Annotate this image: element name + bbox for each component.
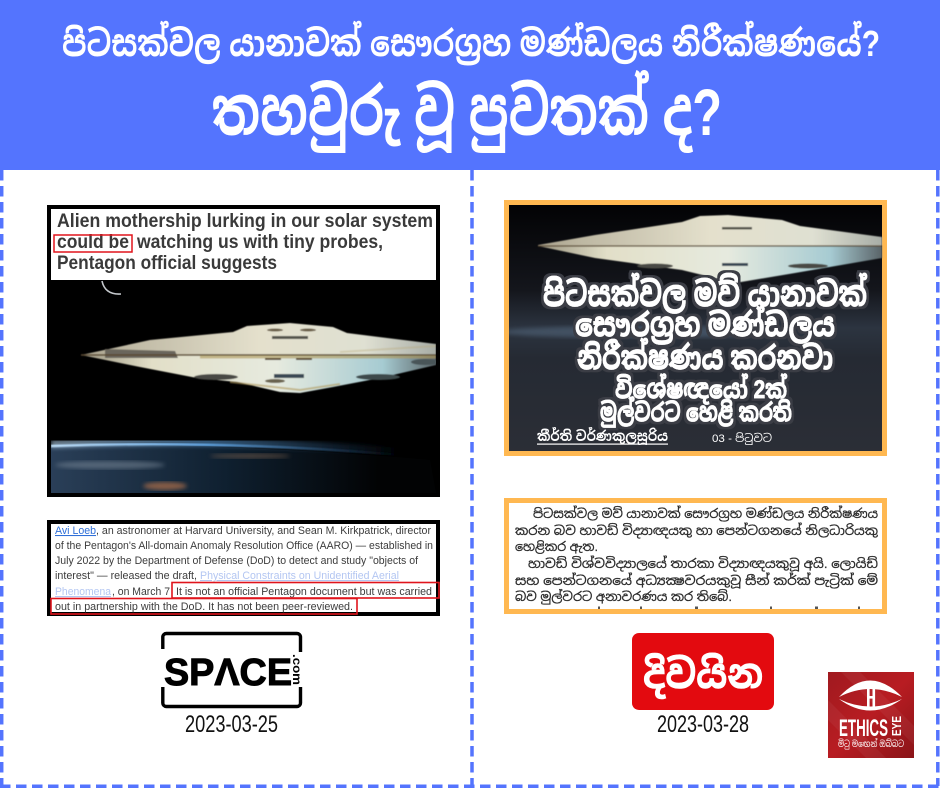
panel: space.com article excerpt: out in partnership with the DoD. It has not been peer-reviewed. — [55, 601, 353, 613]
panel: space.com article excerpt: July 2022 by the Department of Defense (DoD) to detect and study "objects of — [55, 555, 418, 567]
panel: space.com article excerpt: It is not an official Pentagon document but was carried — [176, 586, 432, 598]
headline box: Pentagon official suggests — [57, 253, 277, 274]
headline box: watching us with tiny probes, — [136, 232, 383, 253]
moon crescent — [102, 281, 121, 294]
logo: divaina — [632, 633, 774, 710]
byline — [537, 427, 772, 445]
panel: space.com article excerpt: Phenomena — [55, 586, 111, 598]
date: space.com: 2023-03-25 — [185, 711, 278, 738]
panel: space.com article excerpt: interest" — released the draft, — [55, 570, 197, 582]
panel: divaina article excerpt: පිටසක්වල මව් යානාවක් සෞරග්‍රහ මණ්ඩලය නිරීක්ෂණය — [533, 506, 878, 521]
byline: කීර්ති වර්ණකුලසූරිය — [537, 427, 668, 445]
logo: space.com — [163, 634, 304, 706]
panel: dashed frame — [0, 170, 940, 786]
panel: space.com article excerpt: of the Pentagon's All-domain Anomaly Resolution Office (AARO) — established in — [55, 540, 433, 552]
panel: divaina article excerpt: සහ පෙන්ටගනයේ අධ්‍යක්‍ෂවරයකුවූ සීන් කර්ක් පැට්‍රික් මේ — [515, 573, 878, 588]
logo: ethics eye: ETHICS — [839, 715, 888, 742]
front page headline: විශේෂඥයෝ 2ක් — [615, 373, 788, 405]
logo: divaina: දිවයින — [643, 652, 763, 699]
panel: space.com article excerpt: Avi Loeb, an astronomer at Harvard University, and Sean M. Kirkpatrick, director — [55, 525, 431, 537]
illustration: flying saucer — [538, 215, 882, 283]
front page headline: නිරීක්ෂණය කරනවා — [577, 337, 833, 376]
clipped next line fragment — [598, 606, 860, 609]
front page headline: මුල්වරට හෙළි කරති — [600, 397, 792, 428]
panel: space.com article excerpt — [49, 522, 439, 614]
header banner — [0, 0, 940, 170]
logo: ethics eye: මිටු මඟෙන් ඔබ්බට — [838, 738, 904, 749]
earth horizon — [51, 442, 436, 493]
headline box — [51, 209, 436, 280]
panel: space.com article excerpt: , on March 7 — [112, 586, 170, 598]
logo: space.com: .com — [290, 654, 304, 685]
front page headline: පිටසක්වල මව් යානාවක් — [543, 272, 867, 314]
panel: space.com article image — [47, 205, 440, 497]
logo: ethics eye — [828, 672, 914, 758]
panel: divaina article excerpt: බව මුල්වරට අනාවරණය කර තිබේ. — [515, 588, 732, 604]
byline: 03 - පිටුවට — [712, 432, 772, 445]
heading line 2: තහවුරු වූ පුවතක් ද? — [212, 70, 722, 153]
headline box: Alien mothership lurking in our solar system — [57, 211, 433, 232]
panel: divaina article excerpt: හාවඩ් විශ්වවිද්‍යාලයේ තාරකා විද්‍යාඥයකුවූ අයි. ලොයිඩ් — [528, 556, 878, 571]
panel: divaina front page clipping — [500, 202, 884, 454]
front page headline: සෞරග්‍රහ මණ්ඩලය — [575, 305, 835, 345]
panel: divaina article excerpt: කරන බව හාවඩ් විද්‍යාඥයකු හා පෙන්ටගනයේ නිලධාරියකු — [515, 523, 878, 538]
panel: divaina article excerpt — [506, 500, 884, 612]
logo: ethics eye: EYE — [889, 716, 904, 736]
date: divaina: 2023-03-28 — [657, 711, 749, 738]
illustration: flying saucer — [81, 323, 439, 393]
logo: space.com: SPΛCE — [164, 652, 292, 694]
front page headline — [543, 272, 867, 428]
panel: divaina article excerpt: හෙළිකර ඇත. — [515, 540, 598, 554]
red highlight — [54, 235, 132, 252]
red highlights — [51, 582, 439, 614]
headline box: could be — [57, 232, 129, 253]
panel: space.com article excerpt: Physical Constraints on Unidentified Aerial — [200, 570, 399, 582]
icon: eye — [839, 680, 902, 710]
